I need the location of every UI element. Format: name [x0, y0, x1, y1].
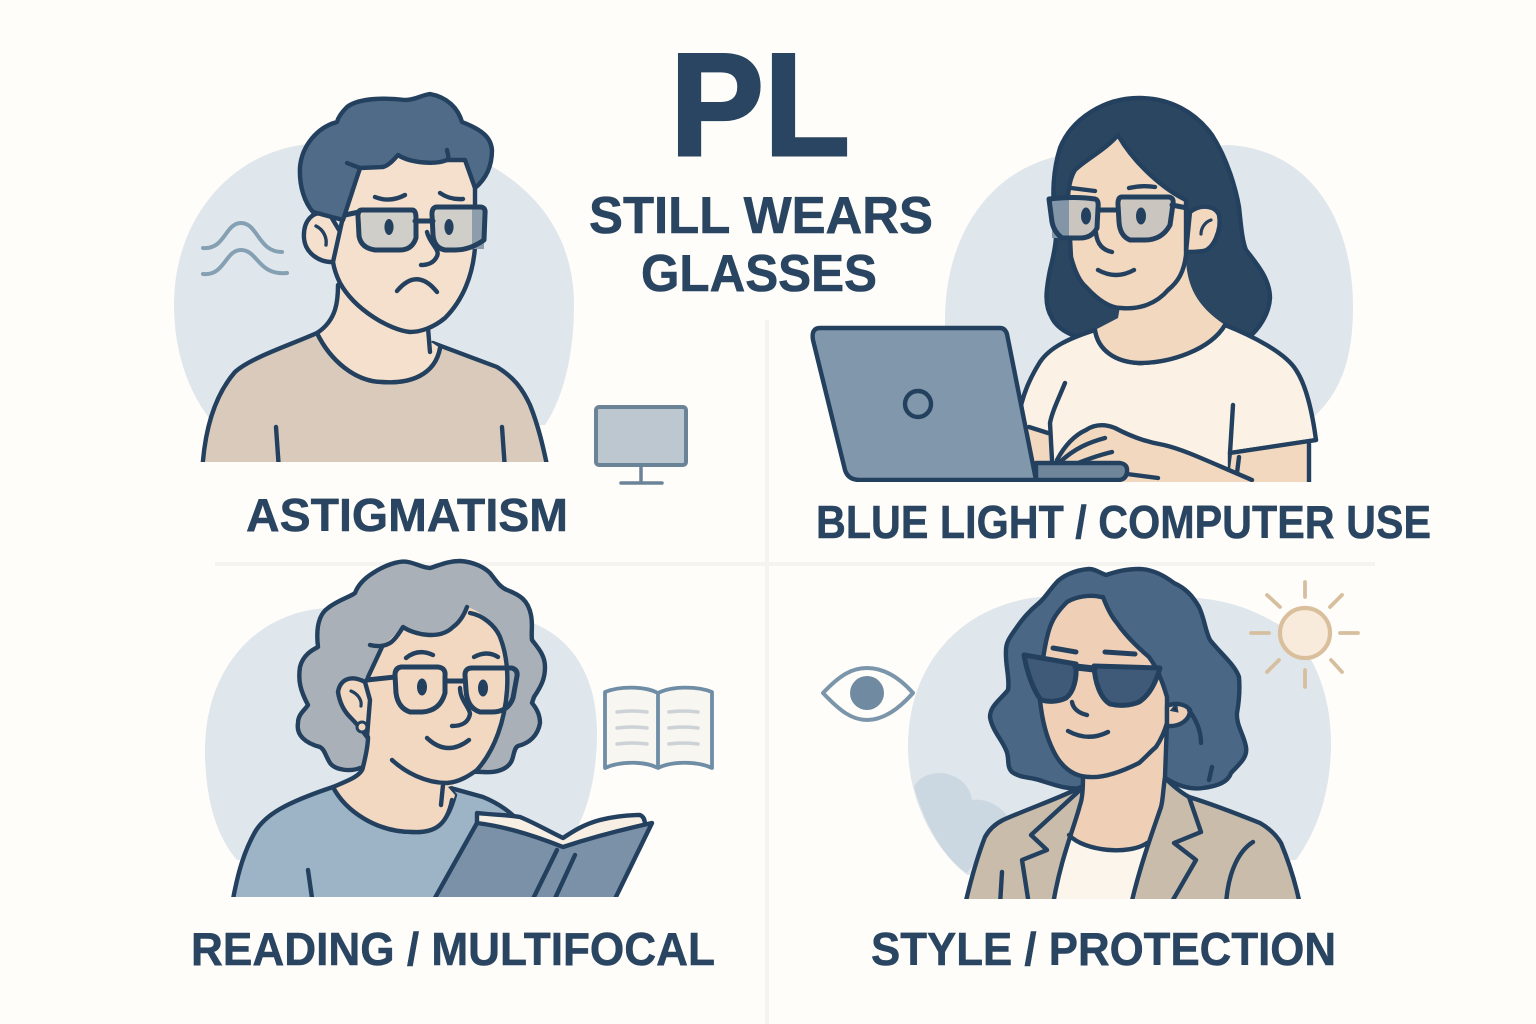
cloud — [914, 773, 1008, 873]
shirt — [202, 333, 549, 475]
neck — [317, 285, 440, 382]
ear and earring — [338, 678, 370, 737]
label: astigmatism: ASTIGMATISM — [246, 489, 568, 541]
glasses — [361, 212, 414, 248]
background blob — [908, 597, 1331, 875]
face — [1040, 596, 1167, 777]
infographic canvas — [174, 53, 1430, 1024]
ear — [304, 213, 345, 262]
neck — [1095, 262, 1225, 363]
forearm and hand — [1029, 427, 1307, 482]
laptop — [1036, 463, 1127, 480]
title: PL: PL — [670, 23, 850, 186]
panel: reading / multifocal — [205, 561, 652, 905]
eyebrows and smile — [406, 652, 498, 748]
eyes — [1081, 208, 1091, 224]
face — [333, 150, 475, 332]
icon: sun — [1251, 582, 1358, 687]
fringe — [368, 607, 467, 677]
eyebrows, nose and smile — [1053, 648, 1135, 654]
person at computer — [813, 98, 1316, 490]
subtitle: still wears glasses — [589, 187, 933, 303]
background blob — [945, 145, 1353, 420]
hair — [1046, 98, 1270, 340]
icon: eye — [823, 668, 913, 720]
panel: astigmatism — [174, 94, 574, 475]
subtitle: still wears glasses: GLASSES — [641, 245, 877, 303]
lapels — [1000, 790, 1253, 905]
icon: open book — [605, 688, 712, 768]
face and neck — [333, 607, 507, 832]
panel: style / protection — [908, 569, 1331, 905]
panel: blue light / computer use — [813, 98, 1353, 490]
hair — [300, 94, 492, 220]
shirt — [1022, 328, 1318, 468]
open book held by reader — [431, 813, 652, 905]
subtitle: still wears glasses: STILL WEARS — [589, 187, 933, 245]
eyebrows, nose and smile — [1071, 186, 1155, 275]
woman in sunglasses — [965, 569, 1300, 905]
neck and undershirt — [1056, 840, 1145, 899]
ear — [1167, 704, 1190, 726]
label: style / protection: STYLE / PROTECTION — [871, 923, 1336, 975]
older woman reading — [232, 561, 545, 905]
hair — [298, 561, 545, 772]
ear — [1188, 208, 1218, 250]
shirt — [232, 787, 520, 905]
background blob — [174, 144, 574, 425]
person with astigmatism — [202, 94, 549, 475]
eyes — [384, 219, 394, 235]
icon: blur waves — [203, 223, 287, 274]
label: reading / multifocal: READING / MULTIFOCAL — [191, 923, 715, 975]
blazer — [965, 777, 1300, 905]
glasses — [1069, 200, 1096, 236]
glasses — [452, 688, 470, 726]
eyebrows, nose and frown — [375, 193, 463, 292]
hair — [990, 569, 1246, 788]
face — [1068, 135, 1186, 308]
sunglasses — [1024, 655, 1076, 701]
eyes — [417, 678, 427, 696]
background blob — [205, 608, 597, 860]
label: blue light / computer use: BLUE LIGHT / COMPUTER USE — [816, 496, 1431, 548]
icon: desktop monitor — [596, 407, 686, 483]
